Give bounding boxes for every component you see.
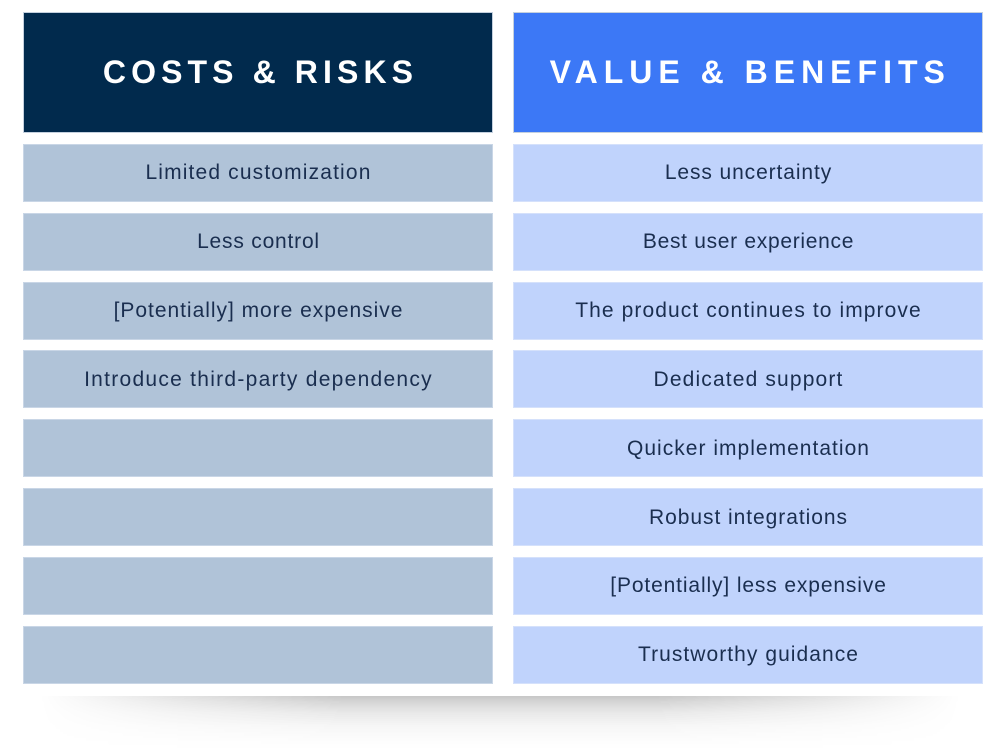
row: best user experience [513, 213, 983, 271]
heading: value and benefits: VALUE & BENEFITS [550, 54, 951, 90]
row: robust integrations [513, 488, 983, 546]
row: product continues to improve [513, 282, 983, 340]
row: potentially more expensive: [Potentially] more expensive [114, 298, 403, 322]
row: third-party dependency: Introduce third-party dependency [84, 368, 433, 391]
row: quicker implementation [513, 419, 983, 477]
row: quicker implementation: Quicker implementation [627, 437, 870, 460]
row: robust integrations: Robust integrations [649, 506, 848, 529]
row: product continues to improve: The product continues to improve [575, 298, 922, 322]
row: limited customization [23, 144, 493, 202]
row: less control: Less control [197, 230, 320, 253]
heading: costs and risks [23, 12, 493, 132]
row: third-party dependency [23, 350, 493, 408]
row: limited customization: Limited customization [145, 161, 372, 184]
row: potentially less expensive: [Potentially] less expensive [610, 574, 887, 597]
row: less uncertainty: Less uncertainty [665, 161, 832, 184]
row: less control [23, 213, 493, 271]
row: empty cost 8 [23, 626, 493, 684]
drop shadow [82, 696, 918, 727]
row: empty cost 5 [23, 419, 493, 477]
row: dedicated support: Dedicated support [654, 368, 844, 391]
row: empty cost 6 [23, 488, 493, 546]
heading: value and benefits [512, 12, 983, 132]
heading: costs and risks: COSTS & RISKS [103, 54, 418, 90]
row: less uncertainty [513, 144, 983, 202]
row: empty cost 7 [23, 557, 493, 615]
row: trustworthy guidance [513, 626, 983, 684]
row: potentially more expensive [23, 282, 493, 340]
row: best user experience: Best user experience [643, 230, 854, 253]
row: trustworthy guidance: Trustworthy guidance [638, 642, 859, 666]
row: potentially less expensive [513, 557, 983, 615]
row: dedicated support [513, 350, 983, 408]
